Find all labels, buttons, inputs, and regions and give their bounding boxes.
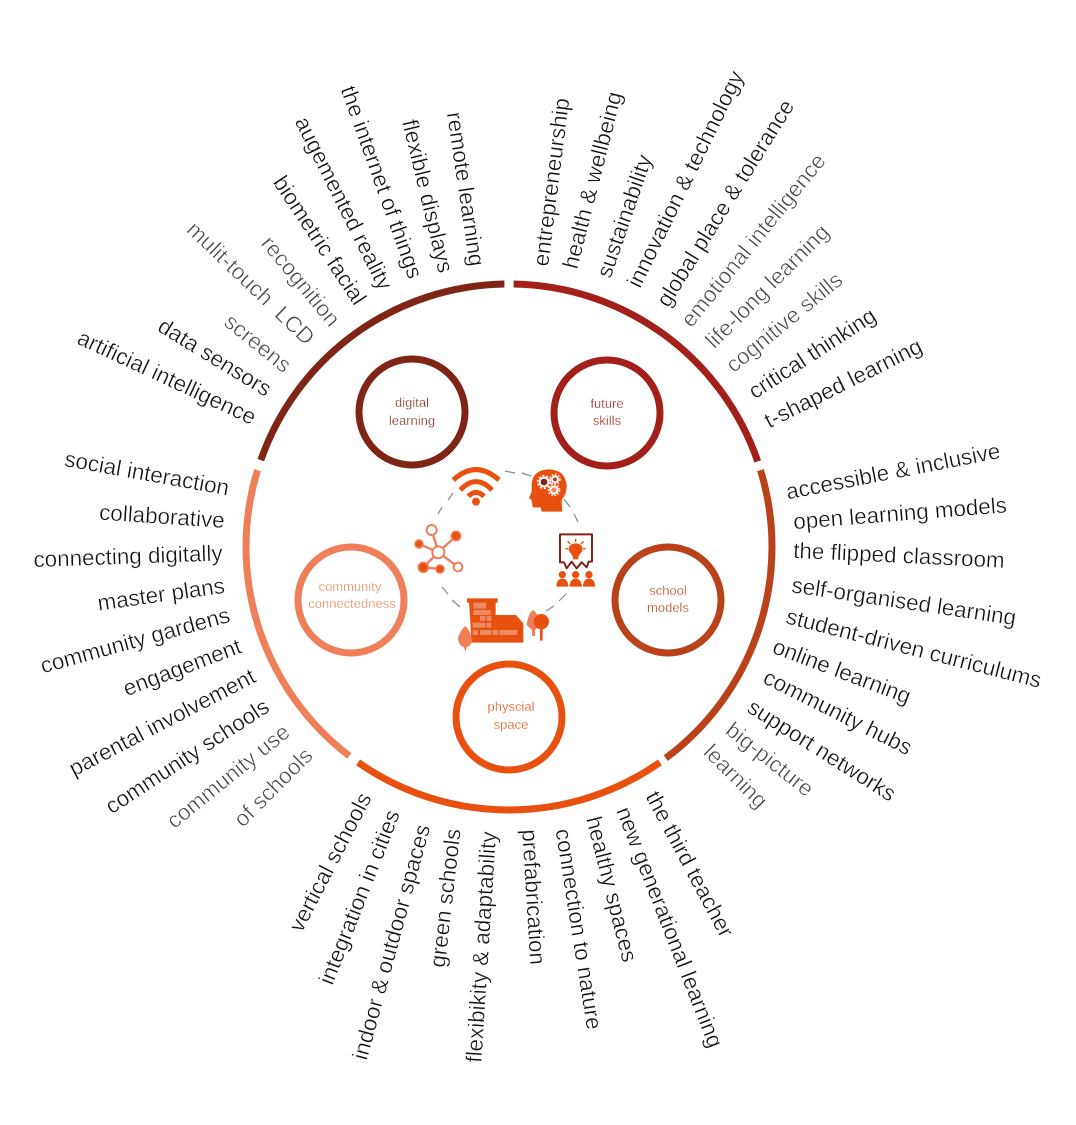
- ring segment: digital learning: [261, 284, 504, 460]
- ring segment: future skills: [514, 284, 758, 461]
- icon: school building with trees: [458, 598, 549, 652]
- circle: physical space: physcial: [488, 699, 535, 714]
- label: the flipped classroom: [793, 538, 1005, 573]
- label: data sensors: [154, 313, 276, 401]
- dashed connector circle: [438, 471, 578, 611]
- label: augemented reality: [290, 112, 398, 295]
- icon: wifi: [453, 470, 499, 506]
- icon: network nodes: [415, 525, 462, 573]
- label: master plans: [96, 573, 226, 616]
- circle: physical space: space: [494, 717, 528, 732]
- label: engagement: [119, 633, 245, 701]
- labels: school models: [699, 438, 1044, 813]
- circle: digital learning: learning: [389, 413, 435, 428]
- label: self-organised learning: [790, 572, 1018, 630]
- label: healthy spaces: [581, 814, 642, 965]
- label: global place & tolerance: [651, 95, 799, 311]
- ring segment: physical space: [358, 762, 660, 810]
- circle: future skills: future: [590, 396, 624, 411]
- labels: digital learning: [74, 82, 490, 430]
- label: artificial intelligence: [74, 325, 260, 430]
- circle: community connectedness: community: [319, 579, 382, 594]
- circle: school models: models: [647, 600, 689, 615]
- label: mulit-touch LCD: [182, 217, 320, 350]
- label: flexibikity & adaptability: [461, 830, 501, 1063]
- label: community hubs: [759, 665, 916, 760]
- label: sustainability: [592, 151, 657, 281]
- outer ring: [246, 284, 772, 810]
- circle: school models: school: [649, 583, 687, 598]
- label: biometric facial: [268, 171, 371, 309]
- label: collaborative: [98, 500, 226, 533]
- label: connection to nature: [550, 827, 607, 1031]
- ring segment: community connectedness: [246, 470, 349, 756]
- label: health & wellbeing: [558, 89, 627, 271]
- labels: physical space: [284, 787, 739, 1063]
- label: cognitive skills: [721, 267, 847, 377]
- label: social interaction: [63, 446, 231, 500]
- label: vertical schools: [284, 788, 377, 936]
- ring segment: school models: [666, 470, 772, 758]
- label: t-shaped learning: [760, 333, 926, 433]
- label: learning: [699, 739, 773, 813]
- label: the third teacher: [641, 787, 739, 942]
- label: green schools: [425, 827, 466, 969]
- icon: head with gears: [529, 469, 567, 512]
- label: entrepreneurship: [528, 96, 574, 268]
- label: screens: [219, 309, 296, 378]
- label: innovation & technology: [622, 66, 749, 291]
- label: critical thinking: [744, 303, 881, 404]
- icon: presentation with lightbulb and audience: [556, 534, 595, 587]
- label: community gardens: [38, 602, 233, 678]
- label: online learning: [769, 634, 914, 709]
- label: support networks: [743, 694, 901, 806]
- label: community schools: [101, 694, 274, 819]
- label: connecting digitally: [33, 541, 224, 572]
- circle: future skills: skills: [593, 413, 622, 428]
- circle: digital learning: digital: [395, 395, 429, 410]
- label: life-long learning: [700, 219, 834, 353]
- label: integration in cities: [314, 806, 405, 988]
- label: big-picture: [721, 717, 819, 801]
- label: parental involvement: [65, 663, 260, 781]
- circle: future skills: [554, 360, 660, 466]
- label: of schools: [229, 743, 318, 832]
- label: the internet of things: [336, 82, 428, 282]
- circle: community connectedness: connectedness: [308, 596, 396, 611]
- label: prefabrication: [517, 829, 550, 965]
- circle: community connectedness: [298, 547, 404, 653]
- circle: physical space: [456, 664, 562, 770]
- labels: community connectedness: [33, 446, 318, 833]
- label: emotional intelligence: [676, 149, 831, 332]
- label: accessible & inclusive: [784, 438, 1002, 504]
- label: open learning models: [792, 492, 1008, 534]
- label: community use: [162, 719, 295, 833]
- label: new generational learning: [611, 803, 728, 1051]
- label: remote learning: [442, 110, 490, 268]
- label: recognition: [256, 231, 345, 331]
- label: flexible displays: [397, 117, 458, 275]
- labels: future skills: [528, 66, 926, 433]
- label: indoor & outdoor spaces: [347, 822, 435, 1062]
- label: student-driven curriculums: [784, 604, 1044, 693]
- circle: school models: [615, 547, 721, 653]
- circle: digital learning: [359, 359, 465, 465]
